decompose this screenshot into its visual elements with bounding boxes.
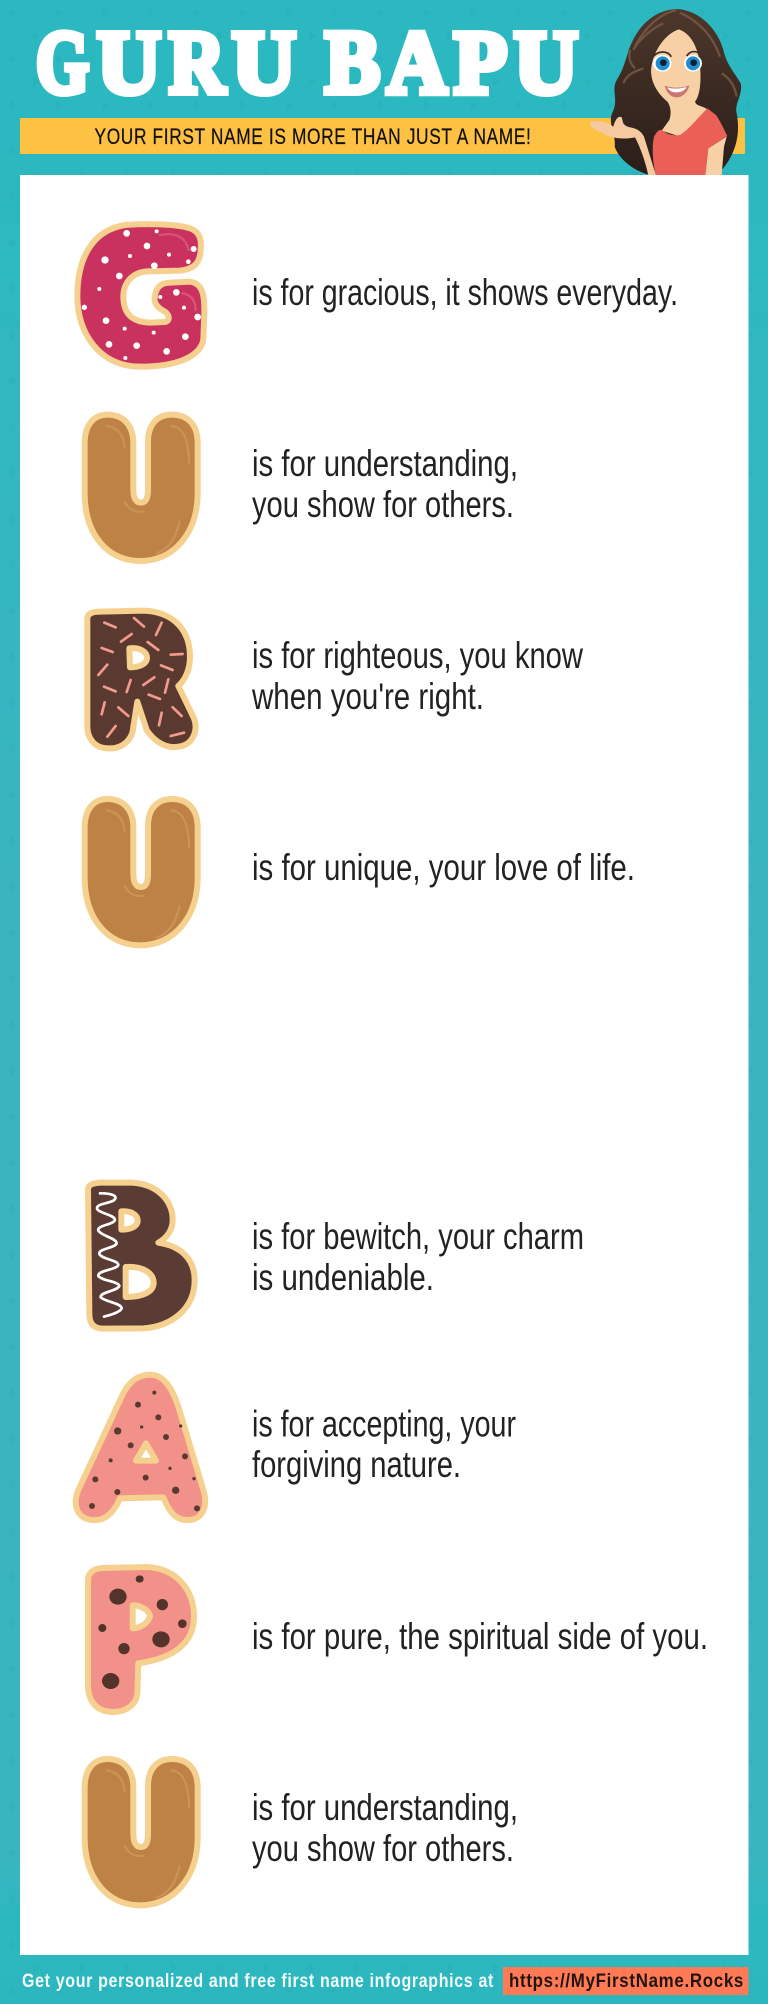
text: B line: is undeniable. [252,1257,434,1298]
text: A line [252,1404,516,1485]
text: R line [251,635,583,717]
text: U line: is for unique, your love of life. [252,847,635,888]
text: U line [252,1787,518,1869]
text: A line: forgiving nature. [252,1444,461,1485]
letter R cookie [87,611,195,748]
title: R [169,14,226,112]
text: A line: is for accepting, your [252,1404,516,1444]
title: B [325,14,380,112]
letter U cookie [85,799,198,945]
letter P cookie [88,1567,194,1712]
text: U line: you show for others. [252,484,514,525]
text: B line: is for bewitch, your charm [252,1216,584,1257]
text: R line: is for righteous, you know [252,635,583,676]
text: B line [252,1216,584,1298]
banner: tagline: YOUR FIRST NAME IS MORE THAN JUST A NAME! [94,124,532,149]
title: U [97,14,161,112]
title: G [36,14,89,112]
letter A cookie [76,1375,205,1520]
text: R line: when you're right. [251,676,484,717]
text: U line [252,443,518,525]
title: A [387,14,447,112]
letter B cookie [88,1183,195,1329]
title: P [454,14,507,112]
letter G cookie [77,224,204,367]
footer text: Get your personalized and free first name infographics at [22,1970,494,1992]
banner: tagline [20,118,745,154]
illustration: woman presenting [590,9,741,175]
letter U cookie [85,415,198,561]
text: U line: you show for others. [252,1828,514,1869]
text: U line: is for understanding, [252,1787,518,1828]
text: U line: is for understanding, [252,443,518,484]
title: U [514,14,578,112]
letter U cookie [85,1759,198,1905]
title: U [232,14,296,112]
